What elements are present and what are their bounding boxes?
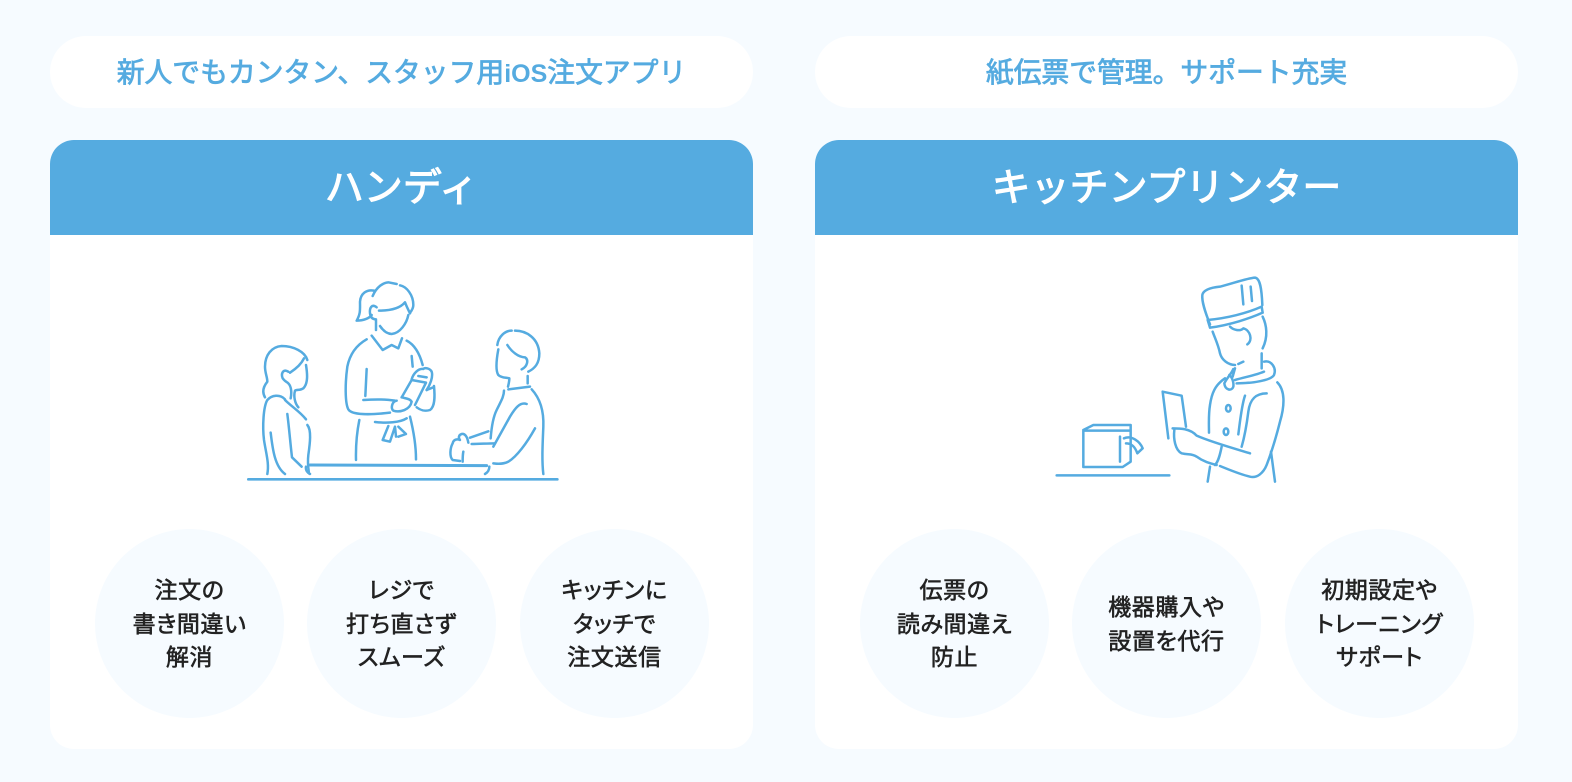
feature circle: slip misreading: 伝票の — [920, 577, 989, 603]
feature circle: setup support: 初期設定や — [1321, 577, 1438, 603]
feature circle: equipment purchase: 機器購入や — [1108, 594, 1225, 620]
feature circle: kitchen send: キッチンに — [561, 577, 668, 603]
feature circle: register — [307, 529, 496, 718]
man customer — [450, 331, 543, 474]
feature circle: setup support: サポート — [1336, 644, 1423, 670]
feature circle: slip misreading: 読み間違え — [897, 611, 1012, 637]
pill: printer tagline — [815, 36, 1518, 108]
feature circle: setup support: トレーニング — [1316, 611, 1443, 637]
feature circle: register: 打ち直さず — [346, 611, 457, 637]
heading: handy: ハンディ — [325, 167, 478, 210]
counter line — [1057, 472, 1169, 479]
feature circle: slip misreading: 防止 — [931, 644, 978, 670]
feature circle: equipment purchase — [1072, 529, 1261, 718]
heading: kitchen printer: キッチンプリンター — [992, 167, 1341, 210]
feature circle: equipment purchase: 設置を代行 — [1108, 628, 1225, 654]
feature circle: register: レジで — [369, 577, 434, 603]
pill: handy tagline: 新人でもカンタン、スタッフ用iOS注文アプリ — [117, 57, 686, 88]
waitress — [346, 282, 435, 460]
feature circle: slip misreading — [860, 529, 1049, 718]
panel: kitchen printer — [815, 140, 1518, 749]
feature circle: kitchen send — [520, 529, 709, 718]
pill: handy tagline — [50, 36, 753, 108]
chef — [1163, 278, 1283, 482]
feature circle: order errors — [95, 529, 284, 718]
heading: handy — [50, 140, 753, 235]
feature circle: kitchen send: 注文送信 — [567, 644, 662, 670]
panel: handy — [50, 140, 753, 749]
printer — [1083, 425, 1143, 467]
heading: kitchen printer — [815, 140, 1518, 235]
feature circle: register: スムーズ — [358, 644, 445, 670]
woman customer — [263, 346, 310, 474]
feature circle: kitchen send: タッチで — [573, 611, 656, 637]
feature circle: setup support — [1285, 529, 1474, 718]
feature circle: order errors: 解消 — [166, 644, 213, 670]
feature circle: order errors: 注文の — [154, 577, 224, 603]
table — [248, 465, 557, 479]
feature circle: order errors: 書き間違い — [133, 611, 246, 637]
pill: printer tagline: 紙伝票で管理。サポート充実 — [986, 57, 1347, 88]
